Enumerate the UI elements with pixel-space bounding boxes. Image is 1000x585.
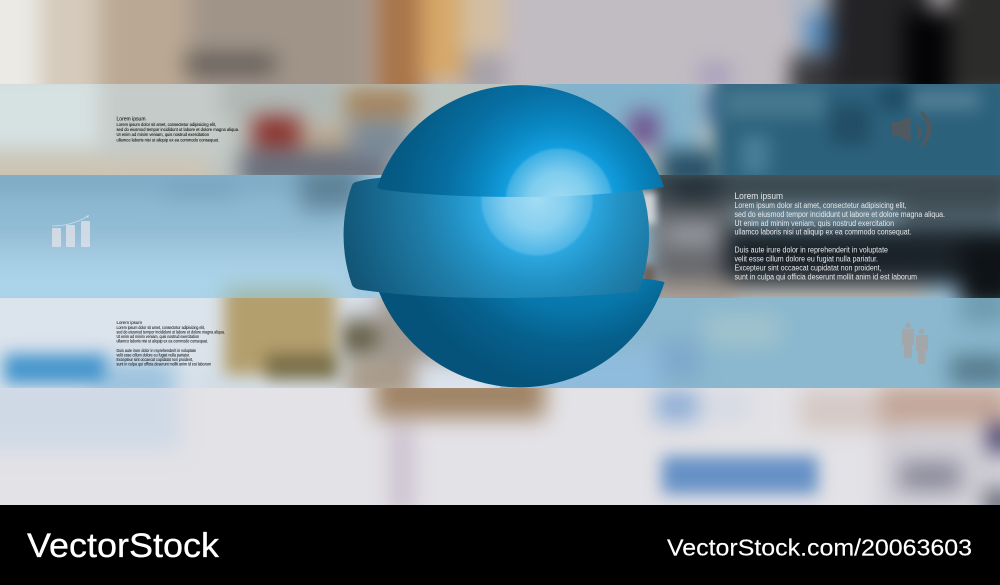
sphere slice: bottom cap (376, 278, 664, 387)
body text: second band: sed do eiusmod tempor incididunt ut labore et dolore magna aliqua. (734, 210, 945, 219)
heading: second band: Lorem ipsum (734, 191, 783, 201)
body text: second band: Duis aute irure dolor in reprehenderit in voluptate (734, 245, 888, 254)
body text: first band: ullamco laboris nisi ut aliquip ex ea commodo consequat. (116, 137, 219, 142)
body text: third band: Lorem ipsum dolor sit amet, consectetur adipisicing elit, (116, 325, 205, 330)
body text: third band: sunt in culpa qui officia deserunt mollit anim id est laborum (116, 362, 212, 366)
footer brand name: VectorStock (27, 527, 220, 565)
icon: speaker (892, 110, 932, 148)
body text: first band (116, 122, 239, 142)
person two (916, 328, 928, 364)
body text: third band: Excepteur sint occaecat cupidatat non proident, (116, 357, 193, 362)
sphere slice: top cap (377, 85, 664, 197)
body text: third band: sed do eiusmod tempor incididunt ut labore et dolore magna aliqua. (116, 330, 225, 334)
background region: second band (0, 175, 1000, 298)
body text: second band: Excepteur sint occaecat cupidatat non proident, (734, 263, 882, 272)
sphere sliced into three parts (344, 85, 664, 387)
body text: third band: Ut enim ad minim veniam, quis nostrud exercitation (116, 334, 200, 339)
body text: third band: Duis aute irure dolor in reprehenderit in voluptate (116, 348, 197, 353)
body text: third band (116, 325, 225, 366)
person one (902, 322, 914, 358)
heading: first band: Lorem ipsum (116, 116, 146, 122)
body text: second band: velit esse cillum dolore eu fugiat nulla pariatur. (734, 254, 878, 263)
icon: bar chart with trend line (52, 215, 90, 247)
text block: second band (734, 191, 945, 281)
footer bar (0, 505, 1000, 585)
body text: second band (734, 201, 945, 281)
body text: third band: ullamco laboris nisi ut aliquip ex ea commodo consequat. (116, 338, 208, 344)
body text: second band: Ut enim ad minim veniam, quis nostrud exercitation (734, 219, 894, 228)
heading: third band: Lorem ipsum (116, 320, 142, 325)
body text: second band: sunt in culpa qui officia deserunt mollit anim id est laborum (734, 272, 917, 281)
body text: second band: Lorem ipsum dolor sit amet, consectetur adipisicing elit, (734, 201, 906, 210)
sphere slice: middle band (344, 177, 649, 298)
icon: two people (902, 322, 928, 364)
background region: first band (0, 84, 1000, 175)
background region: top strip (0, 0, 1000, 84)
background region: third band (0, 298, 1000, 388)
body text: second band: ullamco laboris nisi ut aliquip ex ea commodo consequat. (734, 228, 912, 237)
background region: bottom strip (0, 388, 1000, 505)
text block: first band (116, 116, 239, 142)
body text: first band: Lorem ipsum dolor sit amet, consectetur adipisicing elit, (116, 122, 216, 127)
body text: first band: Ut enim ad minim veniam, quis nostrud exercitation (116, 132, 209, 137)
text block: third band (116, 320, 225, 366)
body text: first band: sed do eiusmod tempor incididunt ut labore et dolore magna aliqua. (116, 127, 239, 132)
footer image url: VectorStock.com/20063603 (667, 534, 972, 560)
body text: third band: velit esse cillum dolore eu fugiat nulla pariatur. (116, 352, 190, 358)
